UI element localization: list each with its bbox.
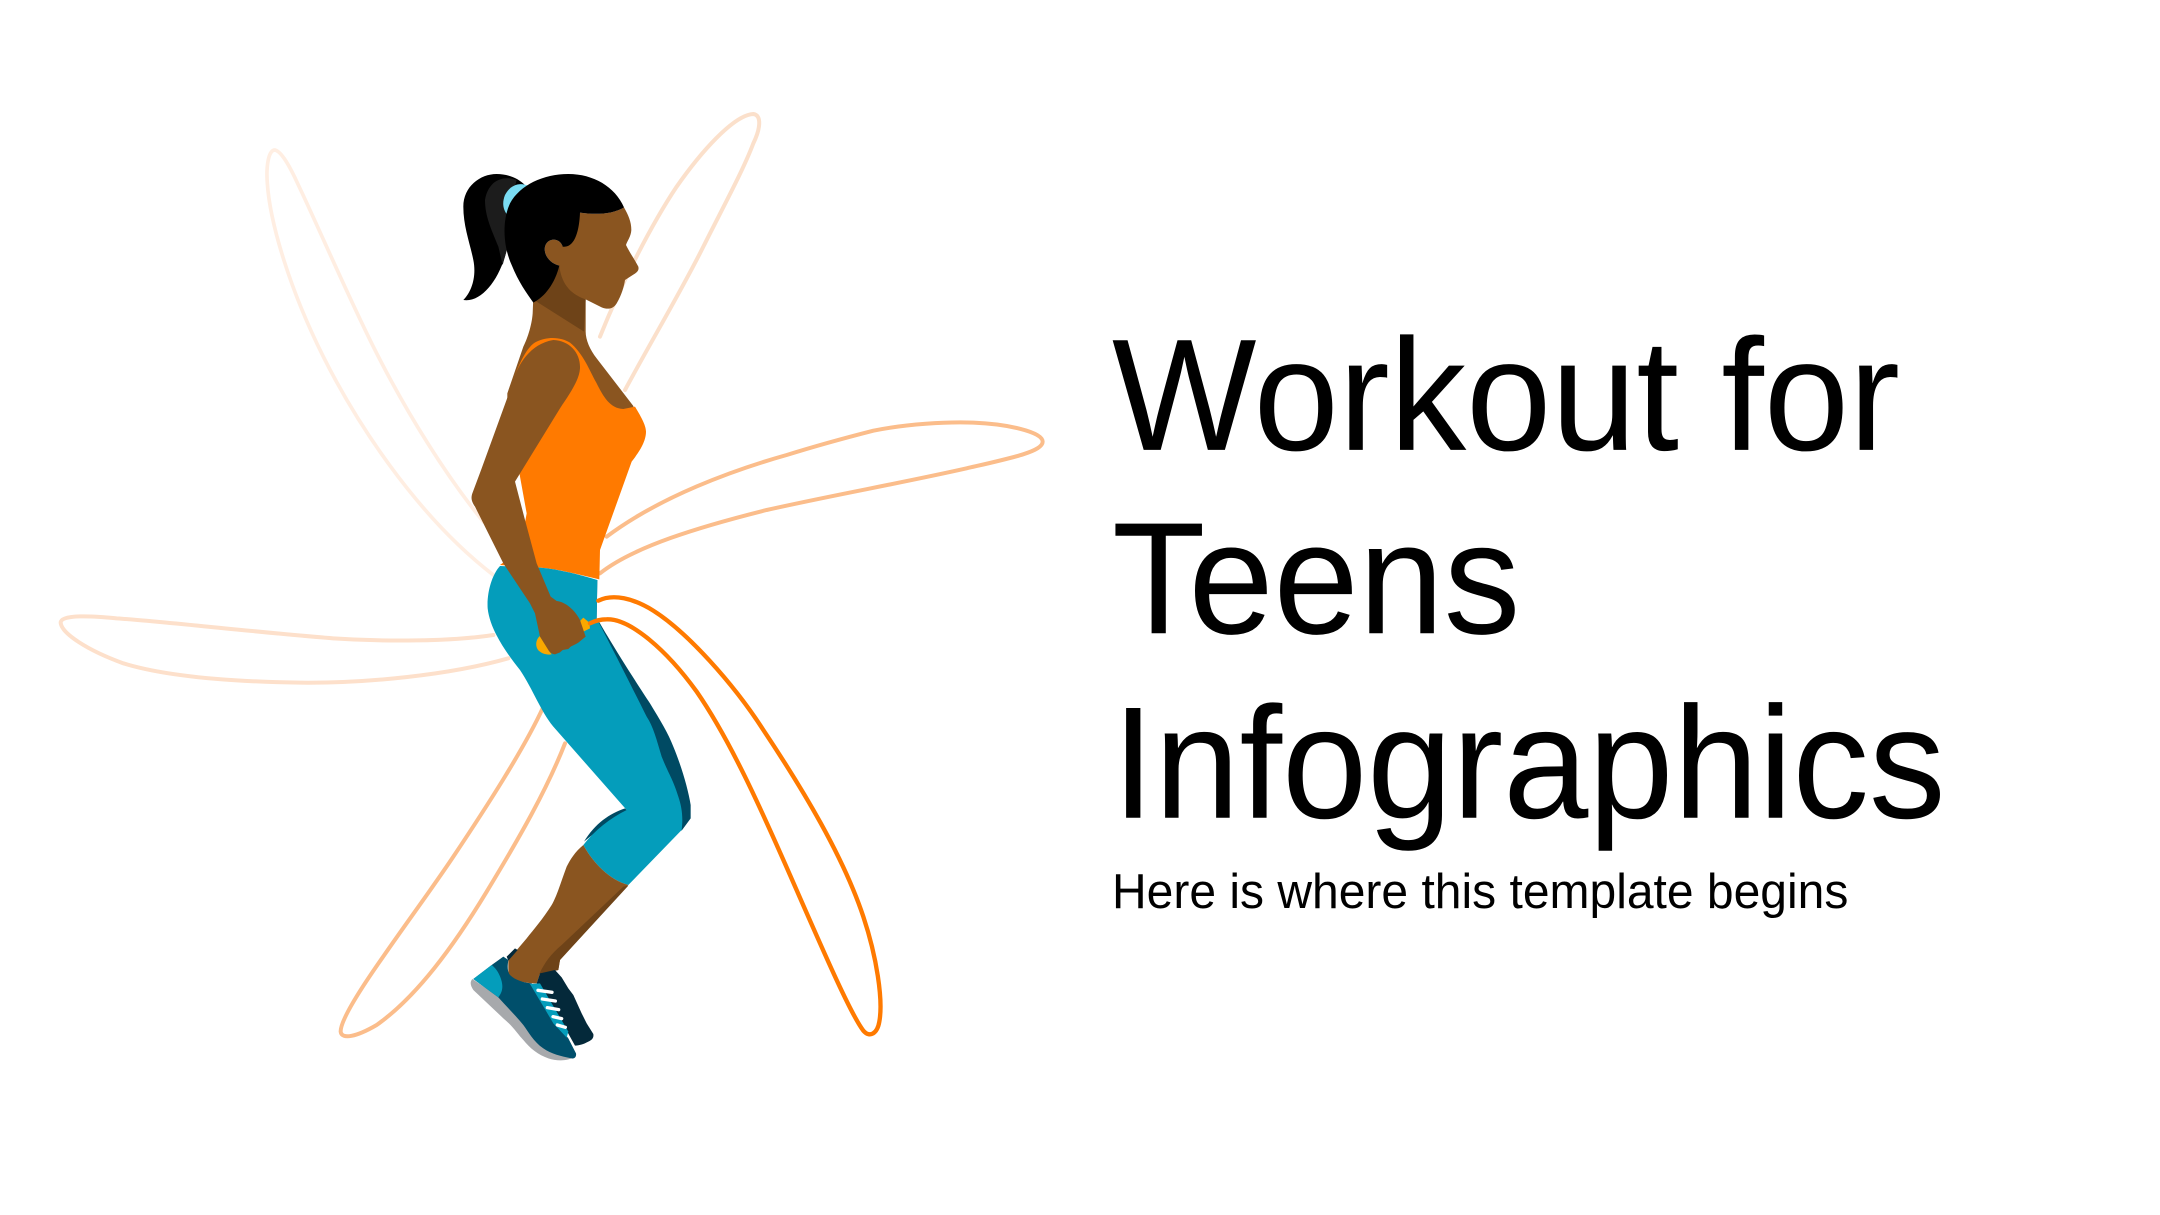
back shoe [537, 970, 593, 1046]
neck shadow [535, 265, 586, 332]
subtitle: Here is where this template begins [1112, 865, 1848, 919]
title: Workout for [1112, 306, 1900, 484]
orange tank top [500, 338, 646, 579]
jump rope [590, 597, 880, 1034]
trail: bottom left [341, 708, 565, 1036]
leggings shadow [587, 580, 691, 831]
trail: left [61, 616, 508, 683]
laces [538, 990, 565, 1027]
teal leggings [488, 566, 682, 885]
arm and hand [472, 340, 586, 654]
shoe tongue [530, 983, 568, 1038]
trail: top left [267, 150, 493, 575]
front shoe [473, 957, 576, 1058]
figure [463, 174, 691, 1060]
rope handle: left [536, 636, 552, 655]
knee shadow [584, 808, 627, 842]
rope handle: right [578, 618, 590, 632]
neck and chest [507, 260, 635, 417]
shoe heel [473, 965, 502, 997]
shoe collar [507, 948, 518, 961]
title: Infographics [1112, 673, 1946, 852]
trail: top right [600, 114, 759, 390]
shoes [471, 948, 593, 1060]
title [1112, 306, 1946, 852]
lower leg [508, 845, 628, 983]
trail: right [600, 422, 1043, 573]
hair [505, 174, 624, 303]
face [545, 207, 639, 309]
shoe sole [471, 979, 575, 1060]
calf shadow [539, 886, 628, 974]
title: Teens [1112, 490, 1520, 668]
ponytail [463, 174, 528, 300]
